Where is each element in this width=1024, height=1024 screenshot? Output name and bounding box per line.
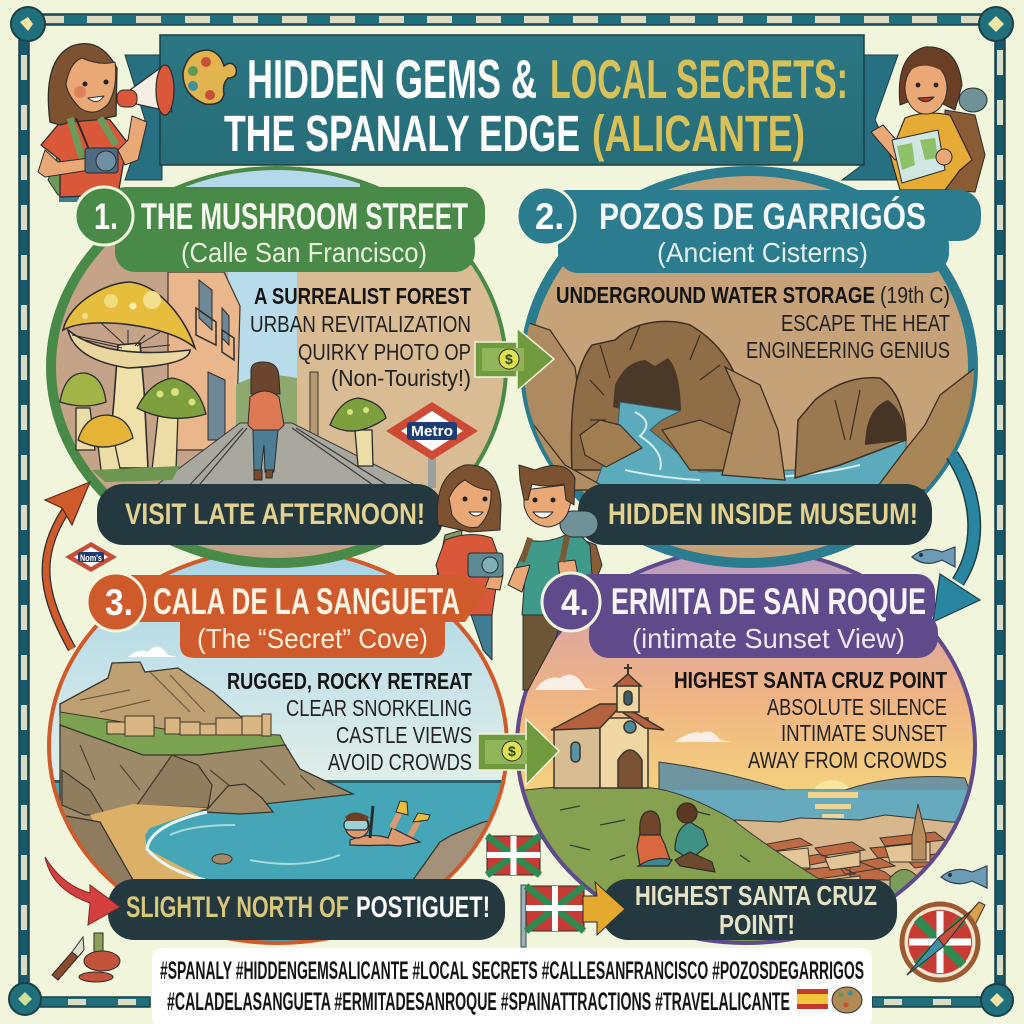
floor rock right bbox=[662, 420, 735, 470]
yellow arrow bbox=[583, 882, 625, 935]
icon: snorkel tools bbox=[52, 933, 120, 982]
clouds bbox=[535, 675, 732, 742]
face bbox=[449, 480, 491, 528]
body text panel 4: INTIMATE SUNSET bbox=[781, 720, 947, 746]
header panel 2: POZOS DE GARRIGÓS bbox=[599, 195, 926, 237]
money arrow 3 to 4: $ bbox=[508, 743, 516, 759]
character: center woman with camera bbox=[436, 465, 503, 660]
panel 4 art: Ermita de San Roque bbox=[510, 550, 990, 950]
fish icon upper bbox=[912, 547, 955, 567]
snorkeler bbox=[344, 801, 430, 846]
icon: basque flag upper bbox=[487, 836, 540, 875]
callout panel 1 bbox=[97, 484, 443, 545]
lower left rock bbox=[66, 815, 134, 884]
stream bbox=[590, 402, 906, 500]
big yellow mushroom bbox=[63, 282, 195, 468]
teal curved arrow bbox=[933, 455, 980, 622]
header panel 3 bbox=[87, 573, 488, 658]
lower arm bbox=[38, 150, 90, 177]
callout panel 2 bbox=[578, 484, 932, 545]
face bbox=[905, 62, 947, 114]
left outer rock bbox=[510, 320, 630, 490]
rock islet bbox=[205, 784, 273, 814]
legs bbox=[523, 612, 565, 690]
header panel 1: (Calle San Francisco) bbox=[181, 237, 427, 268]
distant trees bbox=[236, 375, 297, 425]
chapel bbox=[551, 664, 664, 788]
left boulder bbox=[62, 770, 105, 815]
lower pack bbox=[59, 192, 79, 202]
sweater bbox=[890, 113, 972, 190]
hashtag box bbox=[152, 948, 872, 1024]
right rock bbox=[875, 368, 990, 490]
castle hill bbox=[60, 662, 285, 745]
header panel 1 bbox=[75, 187, 485, 272]
body text panel 2: (19th C) bbox=[880, 282, 950, 308]
body text panel 1: QUIRKY PHOTO OP bbox=[298, 339, 471, 365]
beach bbox=[90, 804, 207, 882]
fish icon lower bbox=[941, 866, 987, 888]
title line 2: THE SPANALY EDGE bbox=[224, 105, 580, 162]
money arrow 3 to 4 bbox=[478, 719, 559, 785]
header panel 4: 4. bbox=[561, 582, 589, 623]
map bbox=[892, 130, 945, 183]
icon: basque flag lower bbox=[521, 885, 584, 947]
callout panel 3 bbox=[108, 879, 505, 940]
sky bbox=[185, 170, 360, 187]
body text panel 3: AVOID CROWDS bbox=[328, 749, 472, 775]
callout panel 4: HIGHEST SANTA CRUZ bbox=[635, 880, 877, 911]
raised hand bbox=[871, 125, 905, 160]
body text panel 2 bbox=[556, 282, 950, 363]
body text panel 2: UNDERGROUND WATER STORAGE bbox=[556, 282, 875, 308]
grass bbox=[92, 466, 180, 482]
bottom left rock bbox=[520, 420, 610, 490]
face bbox=[66, 58, 116, 112]
yellow mushroom small bbox=[78, 415, 133, 478]
green mushroom right bbox=[137, 378, 206, 470]
cave mouth bbox=[613, 358, 681, 420]
money arrow 1 to 2: $ bbox=[505, 351, 513, 367]
torso bbox=[436, 534, 500, 615]
camera bbox=[85, 148, 118, 173]
header panel 4: (intimate Sunset View) bbox=[632, 623, 905, 654]
camera bbox=[468, 553, 503, 577]
straps bbox=[70, 118, 116, 158]
callout panel 4: POINT! bbox=[719, 909, 795, 940]
header panel 3: 3. bbox=[105, 582, 133, 623]
header panel 2: 2. bbox=[535, 196, 564, 237]
green mushroom left bbox=[60, 373, 106, 450]
sun bbox=[814, 780, 849, 790]
sunset sky bbox=[510, 550, 990, 795]
body text panel 1 bbox=[250, 283, 471, 391]
hair bbox=[899, 47, 962, 110]
title banner: (ALICANTE) bbox=[592, 105, 805, 162]
body text panel 4: HIGHEST SANTA CRUZ POINT bbox=[674, 667, 947, 693]
icon: basque compass bbox=[902, 902, 985, 980]
body text panel 3: CASTLE VIEWS bbox=[336, 722, 472, 748]
body text panel 2: ENGINEERING GENIUS bbox=[746, 337, 950, 363]
metro sign: Metro bbox=[411, 423, 453, 440]
header panel 2 bbox=[517, 187, 981, 273]
body text panel 3 bbox=[227, 668, 472, 775]
boulder bbox=[137, 755, 212, 808]
sea bbox=[666, 790, 967, 840]
bedroll bbox=[959, 88, 987, 112]
icon: small palette bbox=[832, 987, 862, 1013]
right wall bbox=[297, 265, 512, 505]
title banner bbox=[125, 35, 905, 180]
body text panel 3: CLEAR SNORKELING bbox=[286, 695, 472, 721]
face bbox=[524, 485, 571, 527]
sea bbox=[54, 780, 502, 941]
town bbox=[734, 804, 956, 894]
raised arm bbox=[118, 116, 147, 165]
green hillside bbox=[524, 786, 820, 941]
panel 3 art: Cala de la Sangueta bbox=[40, 545, 520, 950]
couple sitting bbox=[637, 803, 715, 872]
title line 1: HIDDEN GEMS & bbox=[247, 48, 537, 110]
straps bbox=[522, 536, 567, 562]
panel 2 art: Pozos de Garrigos bbox=[510, 171, 990, 563]
green slope bbox=[60, 712, 285, 755]
small rock bbox=[212, 854, 232, 864]
lower right rock bbox=[413, 820, 488, 879]
money arrow 1 to 2 bbox=[475, 328, 554, 391]
body text panel 3: RUGGED, ROCKY RETREAT bbox=[227, 668, 472, 694]
ribbon tails bbox=[125, 55, 162, 180]
hair bbox=[519, 465, 575, 505]
banner body bbox=[160, 35, 864, 165]
body text panel 1: A SURREALIST FOREST bbox=[254, 283, 471, 309]
icon: megaphone bbox=[117, 65, 174, 115]
metro sign bbox=[386, 402, 478, 488]
character: center man with backpack bbox=[508, 465, 602, 690]
red loop arrow bbox=[45, 482, 90, 649]
header panel 1: 1. bbox=[94, 196, 118, 237]
header panel 4 bbox=[542, 573, 938, 658]
character: woman with megaphone bbox=[38, 44, 147, 202]
walking woman bbox=[248, 362, 284, 480]
small metro sign: Nom's bbox=[80, 553, 102, 563]
floor rock left bbox=[580, 420, 642, 467]
header panel 3: (The “Secret” Cove) bbox=[197, 623, 428, 654]
callout panel 2: HIDDEN INSIDE MUSEUM! bbox=[608, 498, 918, 531]
arm bbox=[485, 575, 503, 590]
hair bbox=[437, 465, 501, 532]
surf bbox=[147, 812, 207, 880]
header panel 1: THE MUSHROOM STREET bbox=[141, 196, 468, 237]
big backpack bbox=[945, 110, 985, 192]
callout panel 4 bbox=[602, 879, 897, 940]
legs bbox=[470, 612, 492, 660]
cliffs bbox=[60, 725, 353, 825]
far hills bbox=[659, 762, 970, 792]
building bbox=[168, 272, 240, 450]
backpack straps bbox=[437, 530, 462, 580]
map hand bbox=[936, 149, 952, 165]
backpack bbox=[48, 125, 78, 195]
body text panel 1: URBAN REVITALIZATION bbox=[250, 311, 471, 337]
red arrow to callout 3 bbox=[45, 857, 120, 925]
backpack bbox=[570, 535, 602, 590]
torso bbox=[515, 530, 592, 615]
callout panel 3: SLIGHTLY NORTH OF bbox=[126, 891, 349, 924]
icon: palette bbox=[183, 50, 236, 104]
body text panel 4 bbox=[674, 667, 947, 773]
header panel 2: (Ancient Cisterns) bbox=[657, 237, 868, 268]
road bbox=[157, 422, 414, 484]
body text panel 2: ESCAPE THE HEAT bbox=[781, 310, 950, 336]
main cave arch bbox=[571, 321, 745, 470]
castle walls bbox=[107, 714, 271, 736]
second cave bbox=[795, 378, 906, 478]
arms bbox=[508, 560, 578, 592]
body text panel 4: ABSOLUTE SILENCE bbox=[767, 694, 947, 720]
sign-side mushroom bbox=[330, 398, 386, 466]
character: woman with map bbox=[871, 47, 987, 192]
callout panel 3: POSTIGUET! bbox=[356, 891, 490, 924]
body text panel 1: (Non-Touristy!) bbox=[331, 365, 471, 391]
title banner: LOCAL SECRETS: bbox=[550, 48, 848, 110]
middle rock bbox=[722, 367, 785, 480]
icon: spanish flag bbox=[797, 989, 828, 1009]
header panel 3: CALA DE LA SANGUETA bbox=[153, 581, 460, 622]
hair bbox=[48, 44, 117, 125]
bedroll bbox=[560, 511, 598, 537]
callout panel 1: VISIT LATE AFTERNOON! bbox=[125, 498, 425, 531]
sky bbox=[51, 560, 504, 785]
panel 1 art: Mushroom Street bbox=[51, 160, 512, 563]
small metro sign bbox=[65, 542, 117, 572]
torso bbox=[41, 116, 127, 197]
cloud bbox=[128, 647, 178, 657]
body text panel 4: AWAY FROM CROWDS bbox=[748, 747, 947, 773]
